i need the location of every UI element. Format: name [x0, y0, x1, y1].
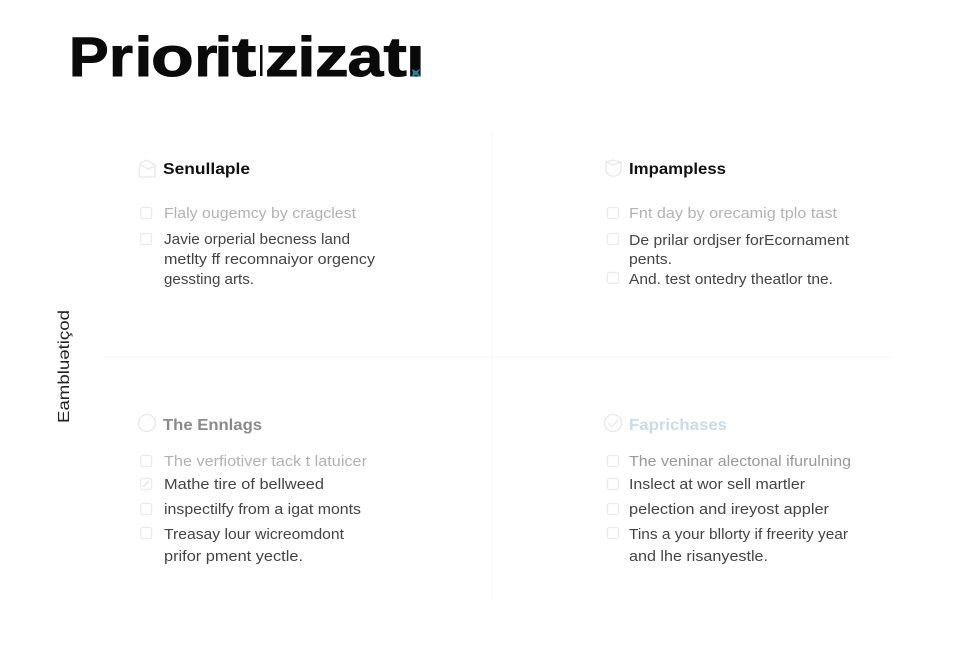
list item: Treasay lour wicreomdont: [164, 527, 344, 543]
list item: pents.: [629, 252, 672, 268]
list item: [608, 527, 848, 565]
title: z: [265, 26, 299, 89]
list item: Flaly ougemcy by cragclest: [164, 206, 356, 222]
list item: The verfiotiver tack t latuicer: [164, 454, 367, 470]
icon: shield: [606, 160, 621, 176]
icon: check circle: [604, 414, 622, 432]
title: o: [151, 27, 194, 88]
list item: Javie orperial becness land: [164, 232, 350, 248]
title: ı: [406, 26, 425, 89]
title: r: [194, 26, 217, 89]
icon: circle: [138, 414, 156, 432]
title: t: [384, 27, 407, 88]
list item: Mathe tire of bellweed: [164, 477, 324, 493]
title: [69, 25, 425, 89]
icon: tag: [139, 160, 155, 177]
title: a: [348, 25, 384, 88]
list item: [608, 233, 849, 268]
title: z: [315, 26, 349, 89]
title: P: [69, 27, 109, 89]
panel: bottom left: [138, 414, 367, 565]
title: i: [298, 25, 315, 88]
list item: Fnt day by orecamig tplo tast: [629, 206, 837, 222]
title: r: [109, 27, 133, 88]
list item: Inslect at wor sell martler: [629, 477, 805, 493]
panel: top right: [606, 160, 849, 288]
heading: Faprichases: [629, 417, 727, 434]
list item: The veninar alectonal ifurulning: [629, 454, 851, 470]
list item: [140, 527, 344, 565]
title: t: [232, 25, 256, 88]
title: i: [214, 25, 232, 88]
vertical axis label: Eambluətiçod: [56, 310, 73, 423]
title: i: [134, 25, 152, 88]
list item: Tins a your bllorty if freerity year: [629, 527, 848, 543]
list item: De prilar ordjser forEcornament: [629, 233, 849, 249]
list item: inspectilfy from a igat monts: [164, 502, 361, 518]
heading: Senullaple: [163, 161, 250, 178]
list item: [140, 232, 376, 288]
list item: prifor pment yectle.: [164, 549, 303, 565]
list item: And. test ontedry theatlor tne.: [629, 272, 833, 288]
list item: pelection and ireyost appler: [629, 502, 829, 518]
panel: bottom right: [604, 414, 851, 565]
heading: Impampless: [629, 161, 726, 178]
list item: gessting arts.: [164, 272, 254, 288]
list item: metlty ff recomnaiyor orgency: [164, 252, 376, 268]
heading: The Ennlags: [163, 417, 262, 434]
panel: top left: [139, 160, 376, 288]
list item: and lhe risanyestle.: [629, 549, 768, 565]
